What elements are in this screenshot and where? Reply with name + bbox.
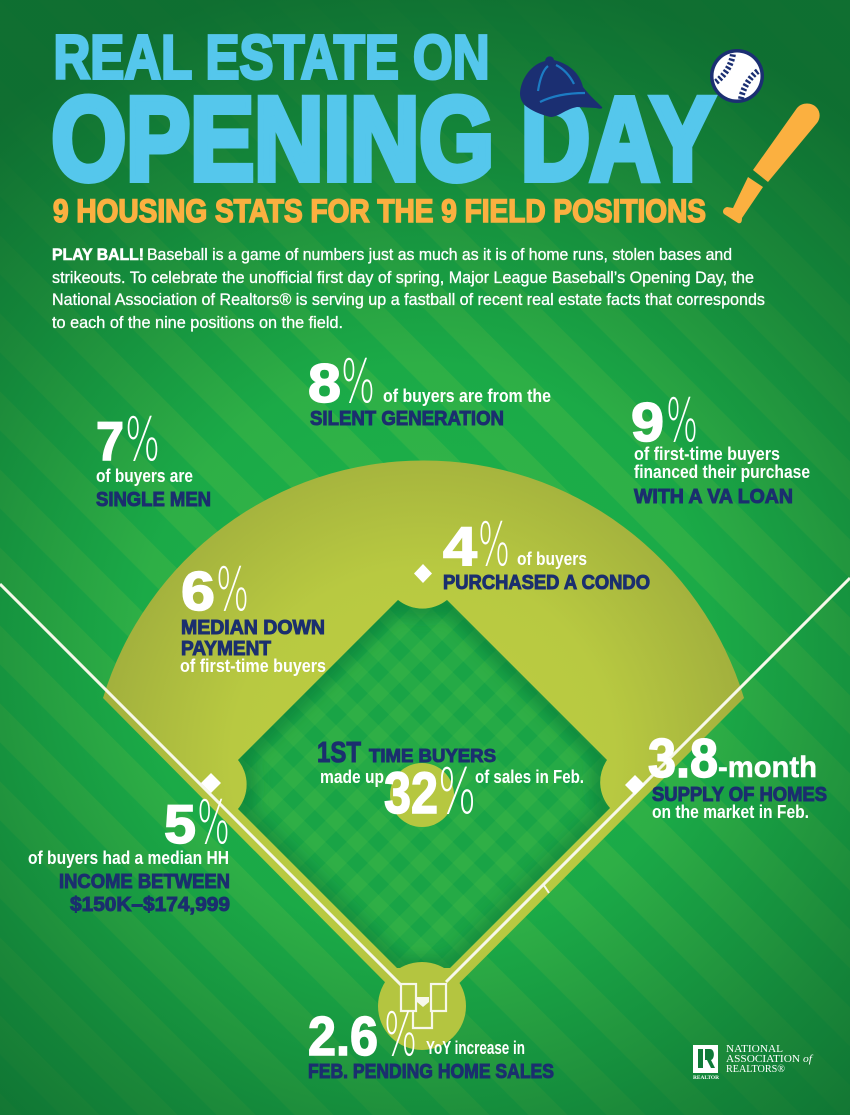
stat: 7% single men: SINGLE MEN <box>96 488 211 511</box>
pitcher's mound <box>390 763 454 827</box>
stat: 32% first-time buyers: made up <box>320 767 384 787</box>
icon: baseball cap <box>520 56 602 117</box>
stat: 8% silent generation: of buyers are from the <box>383 386 551 406</box>
stat: 32% first-time buyers: of sales in Feb. <box>475 767 584 787</box>
stat: 2.6% pending home sales: YoY increase in <box>426 1038 525 1058</box>
stat: 2.6% pending home sales: 2.6 <box>308 1005 378 1067</box>
outfield dirt arc and base paths <box>103 460 744 1020</box>
stat: 8% silent generation <box>308 347 551 430</box>
stat: 8% silent generation: % <box>341 347 375 417</box>
stat: 2.6% pending home sales <box>308 1000 554 1083</box>
infield grass <box>238 600 610 968</box>
stat: 6% median down payment: PAYMENT <box>181 637 271 660</box>
stat: 3.8-month supply: SUPPLY OF HOMES <box>652 783 827 806</box>
icon: baseball bat <box>723 104 820 223</box>
stat: 5% median household income: $150K–$174,999 <box>70 893 230 916</box>
stat: 4% condo <box>443 510 650 594</box>
stat: 6% median down payment: 6 <box>181 560 215 622</box>
foul lines <box>0 578 850 985</box>
stat: 5% median household income: % <box>197 788 230 858</box>
stat: 32% first-time buyers: 32 <box>384 761 438 826</box>
intro paragraph: Baseball is a game of numbers just as much as it is of home runs, stolen bases and <box>147 246 732 264</box>
stat: 32% first-time buyers: TIME BUYERS <box>369 745 496 766</box>
stat: 3.8-month supply: -month <box>718 751 817 784</box>
home plate dirt circle <box>378 962 466 1050</box>
stat: 4% condo: PURCHASED A CONDO <box>443 571 650 594</box>
stat: 32% first-time buyers <box>317 737 584 828</box>
stat: 5% median household income: 5 <box>164 793 196 855</box>
stat: 6% median down payment <box>180 555 326 676</box>
stat: 6% median down payment: MEDIAN DOWN <box>181 616 325 639</box>
third base <box>201 773 221 793</box>
stat: 7% single men: 7 <box>96 410 124 472</box>
stat: 5% median household income: INCOME BETWEEN <box>59 870 230 893</box>
stat: 8% silent generation: 8 <box>308 352 341 414</box>
stat: 9% VA loan: 9 <box>631 391 664 453</box>
intro paragraph: National Association of Realtors® is serving up a fastball of recent real estate facts that corresponds <box>52 291 765 309</box>
stat: 7% single men: of buyers are <box>96 466 193 486</box>
title: OPENING DAY <box>52 74 714 206</box>
intro paragraph: strikeouts. To celebrate the unofficial first day of spring, Major League Baseball’s Opening Day, the <box>52 269 754 287</box>
stat: 3.8-month supply <box>648 727 827 822</box>
stat: 9% VA loan: financed their purchase <box>634 462 810 482</box>
subtitle: 9 HOUSING STATS FOR THE 9 FIELD POSITIONS <box>53 193 706 229</box>
title: REAL ESTATE ON <box>54 24 490 92</box>
intro paragraph: to each of the nine positions on the field. <box>52 314 343 332</box>
stat: 3.8-month supply: 3.8 <box>648 727 718 789</box>
baseball field diagram <box>0 460 850 1050</box>
stat: 9% VA loan <box>631 386 810 508</box>
stat: 32% first-time buyers: % <box>438 755 476 828</box>
first base <box>625 775 645 795</box>
stat: 9% VA loan: WITH A VA LOAN <box>634 485 793 508</box>
stat: 2.6% pending home sales: FEB. PENDING HOME SALES <box>308 1060 554 1083</box>
stat: 4% condo: % <box>478 510 510 580</box>
logo: National Association of Realtors <box>693 1043 814 1081</box>
stat: 6% median down payment: % <box>216 555 249 625</box>
intro paragraph: PLAY BALL! <box>52 246 144 264</box>
stat: 9% VA loan: of first-time buyers <box>634 444 780 464</box>
stat: 6% median down payment: of first-time buyers <box>180 656 326 676</box>
logo: National Association of Realtors: REALTOR <box>693 1075 720 1081</box>
stat: 5% median household income: of buyers had a median HH <box>28 848 229 868</box>
second base <box>414 564 432 583</box>
stat: 7% single men: % <box>125 405 160 475</box>
logo: National Association of Realtors: ASSOCIATION <box>726 1053 800 1065</box>
logo: National Association of Realtors: of <box>803 1053 814 1065</box>
batter's boxes and home plate <box>401 984 446 1028</box>
title <box>52 24 714 206</box>
stat: 4% condo: of buyers <box>517 549 587 569</box>
stat: 9% VA loan: % <box>666 386 698 456</box>
stat: 4% condo: 4 <box>443 515 477 577</box>
intro paragraph <box>52 246 765 332</box>
logo: National Association of Realtors: REALTORS® <box>726 1063 785 1075</box>
logo: National Association of Realtors: NATIONAL <box>726 1043 783 1055</box>
stat: 7% single men <box>96 405 211 511</box>
stat: 2.6% pending home sales: % <box>384 1000 417 1070</box>
stat: 3.8-month supply: on the market in Feb. <box>652 802 809 822</box>
stat: 5% median household income <box>28 788 230 916</box>
stat: 8% silent generation: SILENT GENERATION <box>310 407 504 430</box>
icon: baseball <box>710 49 764 103</box>
stat: 32% first-time buyers: 1ST <box>317 737 361 769</box>
